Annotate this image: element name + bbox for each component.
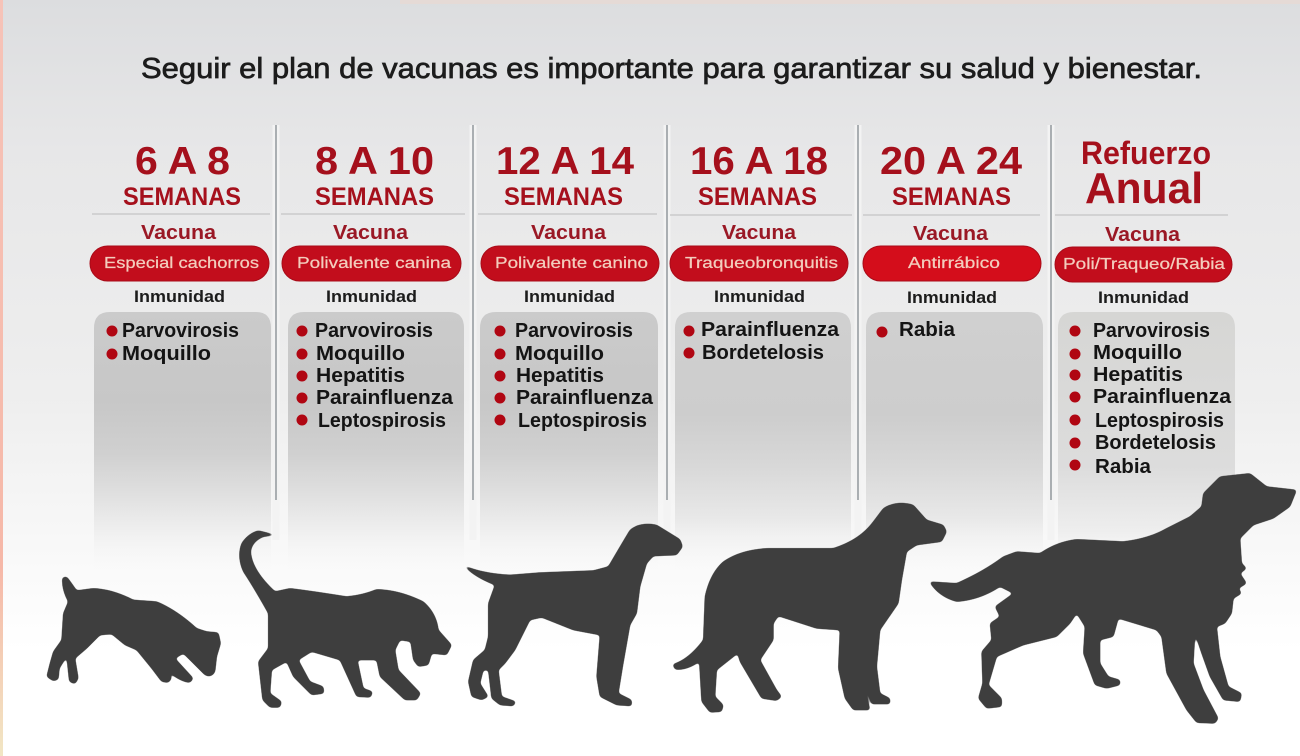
- disease list: Moquillo: [1093, 342, 1182, 364]
- dog 5: long-haired adult: [929, 473, 1297, 723]
- immunity label: Inmunidad: [1098, 288, 1189, 307]
- disease panel: [866, 312, 1043, 570]
- disease list: [1070, 320, 1232, 478]
- disease list: [296, 320, 454, 432]
- disease list: Hepatitis: [516, 365, 604, 387]
- disease list: Moquillo: [515, 343, 604, 365]
- vaccine pill: [481, 246, 659, 281]
- age heading: 12 A 14: [496, 140, 634, 183]
- vaccine label: Vacuna: [1105, 224, 1181, 246]
- disease list: Rabia: [899, 319, 956, 341]
- immunity label: Inmunidad: [134, 287, 225, 306]
- disease list: Leptospirosis: [1095, 410, 1224, 432]
- vaccine pill: [1055, 247, 1232, 282]
- age heading: [496, 140, 634, 211]
- vaccine label: Vacuna: [531, 222, 607, 244]
- column dividers: [276, 125, 1051, 540]
- column: 20 a 24 semanas: [863, 140, 1043, 570]
- disease list: Parvovirosis: [315, 320, 433, 342]
- age heading: 8 A 10: [315, 140, 434, 183]
- age heading: SEMANAS: [892, 183, 1011, 211]
- dog silhouettes: [47, 473, 1297, 723]
- disease list: Parvovirosis: [1093, 320, 1210, 342]
- age heading: SEMANAS: [504, 183, 623, 211]
- vaccine pill: Traqueobronquitis: [685, 255, 838, 272]
- annual booster heading: [1081, 135, 1211, 213]
- disease list: Moquillo: [316, 343, 405, 365]
- column: refuerzo anual: [1055, 135, 1235, 570]
- vaccine label: Vacuna: [141, 222, 217, 244]
- annual booster heading: Refuerzo: [1081, 135, 1211, 171]
- vaccine label: Vacuna: [722, 222, 797, 244]
- vaccine pill: Polivalente canino: [495, 255, 648, 272]
- disease list: Parainfluenza: [516, 387, 654, 409]
- age heading: [315, 140, 434, 211]
- disease list: Moquillo: [122, 343, 211, 365]
- immunity label: Inmunidad: [907, 288, 997, 307]
- age heading: [123, 140, 241, 211]
- vaccine pill: [863, 246, 1041, 281]
- disease list: Bordetelosis: [1095, 432, 1216, 454]
- age heading: 20 A 24: [880, 140, 1022, 183]
- age heading: [880, 140, 1022, 211]
- age heading: SEMANAS: [698, 183, 817, 211]
- vaccine pill: [90, 246, 269, 281]
- immunity label: Inmunidad: [326, 287, 417, 306]
- vaccine pill: Especial cachorros: [104, 255, 259, 272]
- vaccine label: Vacuna: [913, 223, 989, 245]
- dog 2: young dog walking: [240, 531, 452, 707]
- disease list: Bordetelosis: [702, 342, 824, 364]
- age heading: 6 A 8: [135, 140, 230, 183]
- age heading: SEMANAS: [315, 183, 434, 211]
- disease list: [876, 319, 956, 341]
- vaccine pill: [282, 246, 461, 281]
- dog 3: pointer standing: [463, 524, 683, 706]
- vaccine pill: Polivalente canina: [297, 255, 451, 272]
- column: 12 a 14 semanas: [478, 140, 659, 570]
- disease list: Hepatitis: [1093, 364, 1183, 386]
- age heading: 16 A 18: [690, 140, 828, 183]
- disease list: [684, 319, 840, 364]
- disease list: Parvovirosis: [122, 320, 239, 342]
- disease panel: [1058, 312, 1235, 570]
- disease list: Parainfluenza: [701, 319, 840, 341]
- column: 6 a 8 semanas: [90, 140, 271, 570]
- disease list: Leptospirosis: [318, 410, 446, 432]
- disease list: Rabia: [1095, 456, 1152, 478]
- annual booster heading: Anual: [1085, 164, 1203, 213]
- disease list: Parvovirosis: [515, 320, 633, 342]
- disease panel: [480, 312, 658, 570]
- disease list: Parainfluenza: [316, 387, 454, 409]
- disease list: [494, 320, 654, 432]
- vaccine pill: [670, 246, 848, 281]
- disease panel: [288, 312, 464, 570]
- immunity label: Inmunidad: [714, 287, 805, 306]
- column: 16 a 18 semanas: [670, 140, 852, 570]
- disease list: Leptospirosis: [518, 410, 647, 432]
- age heading: SEMANAS: [123, 183, 241, 211]
- vaccine pill: Antirrábico: [908, 255, 1000, 272]
- age heading: [690, 140, 828, 211]
- disease list: [106, 320, 239, 365]
- dog 4: labrador standing: [673, 503, 947, 712]
- heading: Seguir el plan de vacunas es importante para garantizar su salud y bienestar.: [141, 53, 1202, 85]
- disease panel: [675, 312, 851, 570]
- vaccine label: Vacuna: [333, 222, 409, 244]
- disease list: Hepatitis: [316, 365, 405, 387]
- immunity label: Inmunidad: [524, 287, 615, 306]
- vaccine pill: Poli/Traqueo/Rabia: [1063, 256, 1225, 273]
- disease list: Parainfluenza: [1093, 386, 1232, 408]
- dog 1: sniffing puppy: [47, 577, 221, 684]
- column: 8 a 10 semanas: [281, 140, 465, 570]
- disease panel: [94, 312, 271, 570]
